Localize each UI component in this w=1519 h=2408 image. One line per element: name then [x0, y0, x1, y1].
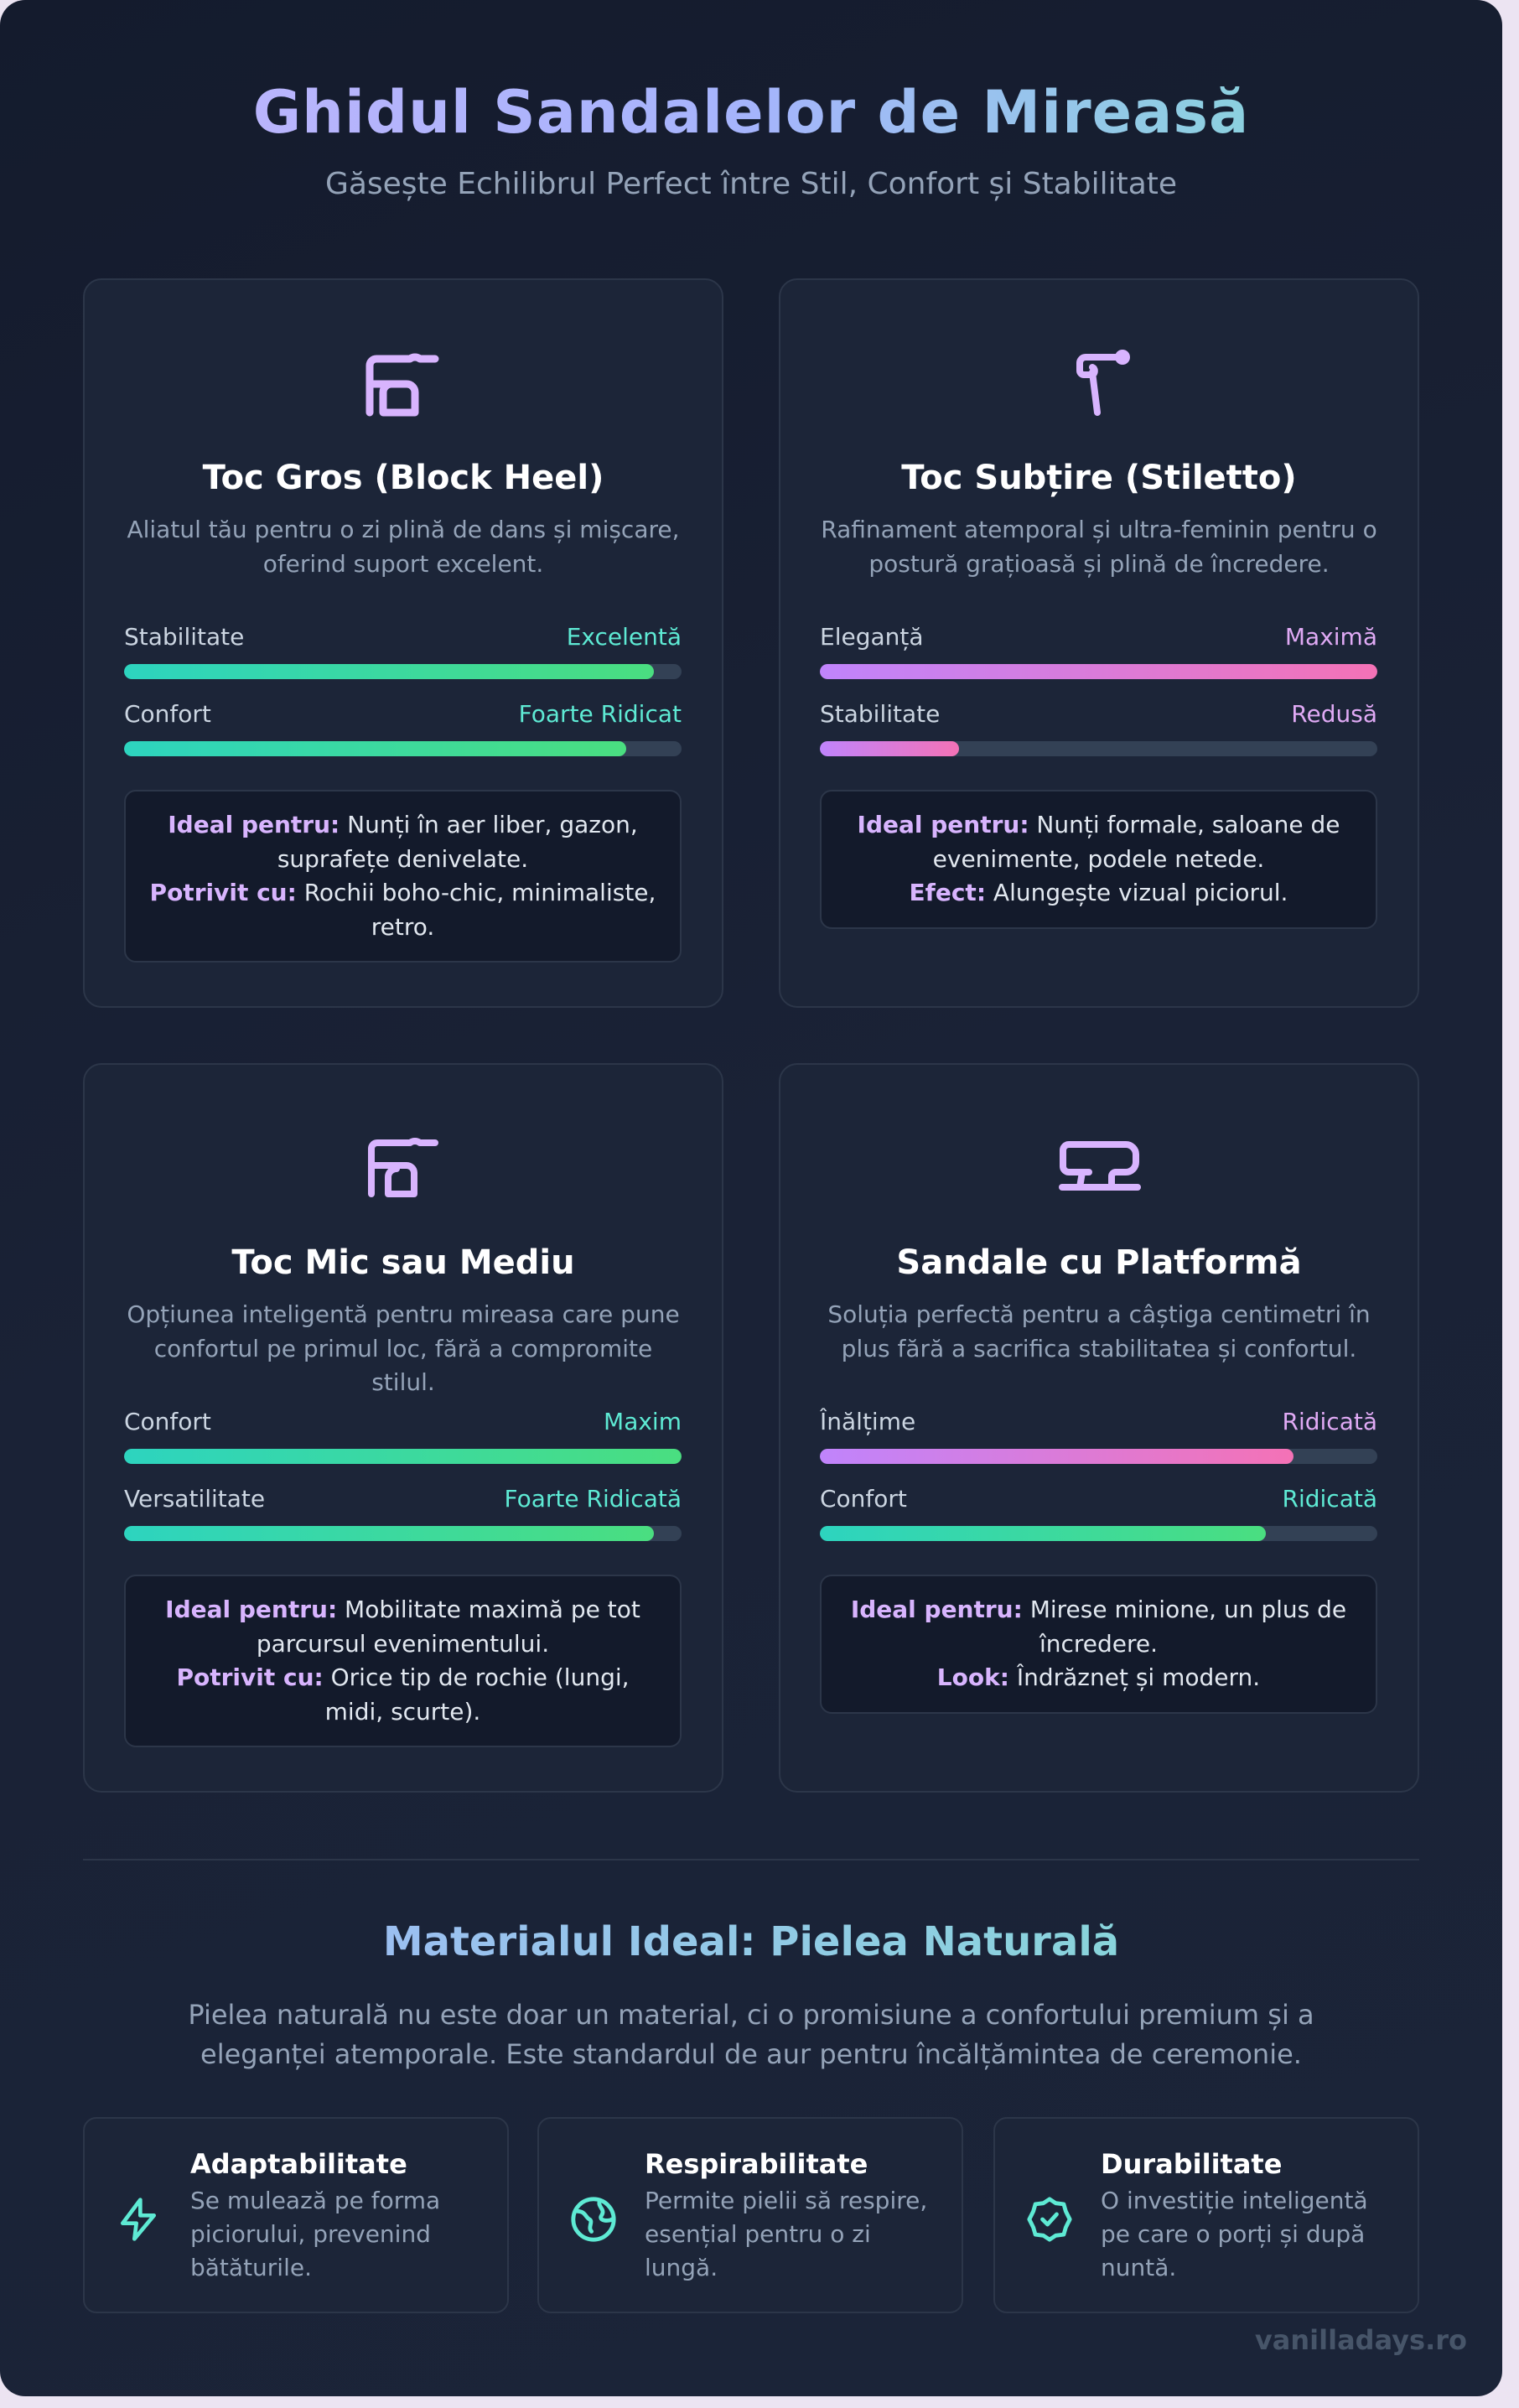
- callout: ideal: Potrivit cu: Orice tip de rochie (lungi, midi, scurte).: [176, 1663, 630, 1726]
- section heading: Materialul Ideal: Pielea Naturală: [383, 1918, 1119, 1965]
- heading: Sandale cu Platformă: [896, 1243, 1302, 1282]
- metric: confort: [820, 1485, 1377, 1513]
- metric: eleganta: [820, 623, 1377, 651]
- callout: ideal: Efect: Alungește vizual piciorul.: [910, 879, 1288, 906]
- bar: eleganta: [820, 664, 1377, 679]
- description: [127, 1300, 680, 1396]
- metric: confort: Maxim: [604, 1408, 682, 1435]
- icon: stiletto: [1076, 350, 1130, 416]
- metric: stabilitate: Stabilitate: [124, 623, 244, 651]
- feature text: O investiție inteligentă pe care o porți și după nuntă.: [1101, 2187, 1368, 2281]
- callout: ideal: Ideal pentru: Mirese minione, un plus de încredere.: [851, 1596, 1346, 1657]
- metric: stabilitate: Redusă: [1291, 700, 1377, 728]
- heading: Toc Mic sau Mediu: [231, 1243, 575, 1282]
- panel: block heel: [83, 278, 723, 1008]
- icon: lightning: [121, 2198, 156, 2241]
- metric: versatilitate: Versatilitate: [124, 1485, 265, 1513]
- icon: block heel: [365, 354, 439, 416]
- icon: low heel: [368, 1138, 438, 1197]
- bar: confort: [124, 1449, 682, 1464]
- callout: ideal: Ideal pentru: Nunți în aer liber, gazon, suprafețe denivelate.: [168, 811, 638, 872]
- callout: ideal: [124, 790, 682, 963]
- metric: stabilitate: [124, 623, 682, 651]
- heading: Toc Subțire (Stiletto): [901, 459, 1297, 497]
- callout: ideal: [820, 790, 1377, 929]
- metric: confort: [124, 1408, 682, 1435]
- feature text: Permite pielii să respire, esențial pentru o zi lungă.: [645, 2187, 927, 2281]
- metric: eleganta: Eleganță: [820, 623, 924, 651]
- metric: confort: Ridicată: [1283, 1485, 1377, 1513]
- panel: durabilitate: [993, 2117, 1419, 2313]
- description: Opțiunea inteligentă pentru mireasa care pune: [127, 1300, 680, 1328]
- title: [0, 75, 1502, 149]
- icon: globe: [571, 2197, 616, 2242]
- subtitle: Găsește Echilibrul Perfect între Stil, Confort și Stabilitate: [325, 167, 1177, 201]
- metric: inaltime: [820, 1408, 1377, 1435]
- bar: inaltime: [820, 1449, 1377, 1464]
- panel: stiletto: [779, 278, 1419, 1008]
- description: Rafinament atemporal și ultra-feminin pentru o postură grațioasă și plină de încredere.: [821, 516, 1377, 577]
- metric: versatilitate: [124, 1485, 682, 1513]
- callout: ideal: [820, 1575, 1377, 1714]
- heading: Toc Gros (Block Heel): [203, 459, 604, 497]
- description: Soluția perfectă pentru a câștiga centimetri în plus fără a sacrifica stabilitatea și confortul.: [827, 1300, 1371, 1362]
- callout: ideal: Look: Îndrăzneț și modern.: [937, 1663, 1260, 1691]
- bar: confort: [820, 1526, 1377, 1541]
- metric: inaltime: Înălțime: [820, 1408, 915, 1435]
- metric: versatilitate: Foarte Ridicată: [505, 1485, 682, 1513]
- metric: eleganta: Maximă: [1285, 623, 1377, 651]
- bar: versatilitate: [124, 1526, 682, 1541]
- section heading: [0, 1917, 1502, 1967]
- title: Ghidul Sandalelor de Mireasă: [253, 78, 1249, 147]
- panel: platform: [779, 1063, 1419, 1793]
- panel: adaptabilitate: [83, 2117, 509, 2313]
- feature title: Respirabilitate: [645, 2148, 868, 2180]
- callout: ideal: Ideal pentru: Nunți formale, saloane de evenimente, podele netede.: [858, 811, 1340, 872]
- metric: inaltime: Ridicată: [1283, 1408, 1377, 1435]
- metric: stabilitate: Excelentă: [567, 623, 682, 651]
- icon: platform: [1059, 1141, 1141, 1191]
- footer brand: vanilladays.ro: [1255, 2324, 1467, 2356]
- panel: low heel: [83, 1063, 723, 1793]
- metric: confort: [124, 700, 682, 728]
- feature text: Se mulează pe forma piciorului, prevenind bătăturile.: [190, 2187, 440, 2281]
- panel: respirabilitate: [537, 2117, 963, 2313]
- metric: confort: Confort: [820, 1485, 907, 1513]
- bar: stabilitate: [820, 741, 1377, 756]
- description: stilul.: [371, 1368, 435, 1396]
- callout: ideal: Ideal pentru: Mobilitate maximă pe tot parcursul evenimentului.: [165, 1596, 640, 1657]
- feature title: Durabilitate: [1101, 2148, 1282, 2180]
- callout: ideal: Potrivit cu: Rochii boho-chic, minimaliste, retro.: [150, 879, 656, 941]
- callout: ideal: [124, 1575, 682, 1747]
- description: Aliatul tău pentru o zi plină de dans și mișcare, oferind suport excelent.: [127, 516, 680, 577]
- metric: stabilitate: Stabilitate: [820, 700, 940, 728]
- metric: stabilitate: [820, 700, 1377, 728]
- icon: badge check: [1027, 2197, 1072, 2242]
- metric: confort: Confort: [124, 700, 211, 728]
- metric: confort: Foarte Ridicat: [519, 700, 682, 728]
- section paragraph: Pielea naturală nu este doar un material, ci o promisiune a confortului premium și a eleganței atemporale. Este standardul de aur pentru încălțămintea de ceremonie.: [188, 1999, 1314, 2070]
- description: confortul pe primul loc, fără a compromite: [154, 1335, 652, 1362]
- bar: confort: [124, 741, 682, 756]
- metric: confort: Confort: [124, 1408, 211, 1435]
- bar: stabilitate: [124, 664, 682, 679]
- feature title: Adaptabilitate: [190, 2148, 407, 2180]
